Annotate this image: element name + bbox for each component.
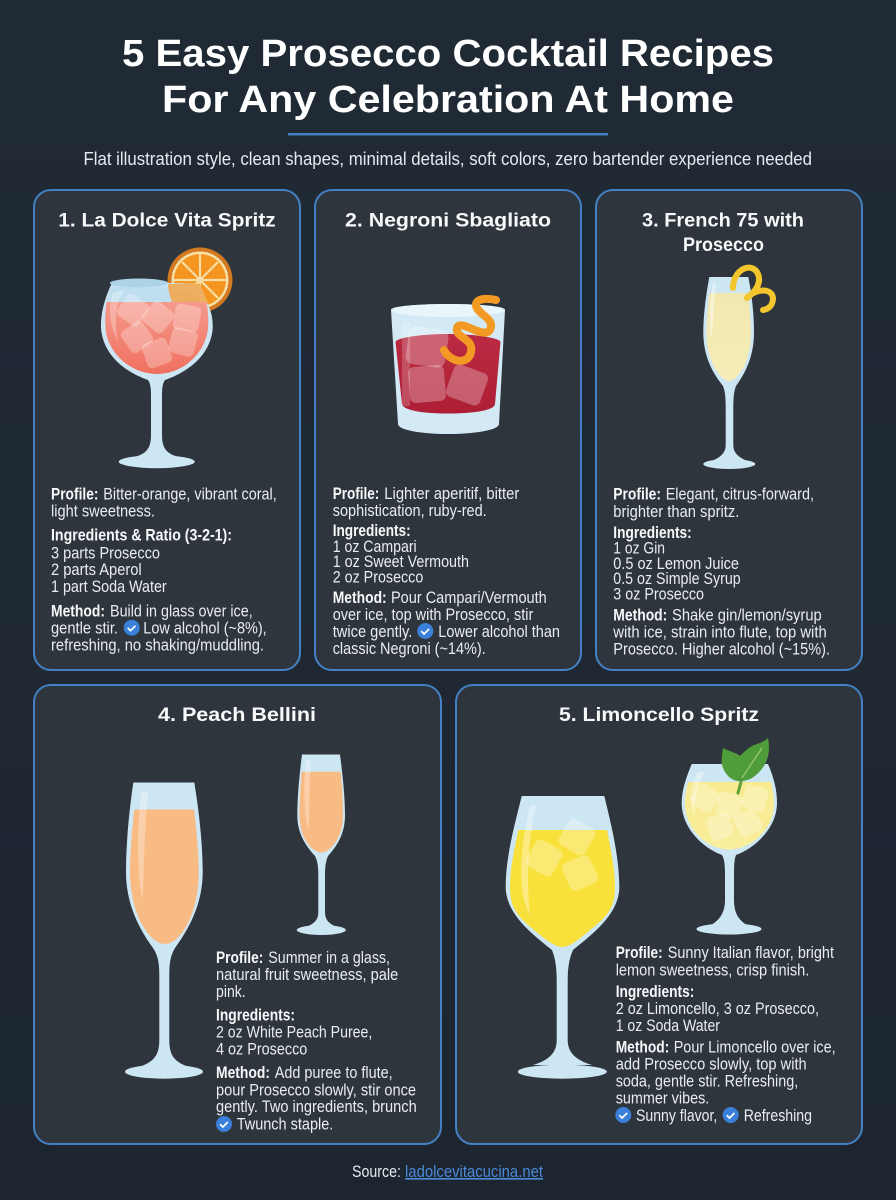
text: recipe 4: natural fruit sweetness, pale	[216, 966, 398, 984]
text: recipe 3: 1 oz Gin	[613, 540, 665, 558]
source footer: ladolcevitacucina.net	[405, 1163, 543, 1181]
text: recipe 3: Prosecco. Higher alcohol (~15%).	[613, 640, 830, 658]
text: recipe 4: Summer in a glass,	[268, 949, 390, 967]
text: recipe 1: gentle stir.	[51, 620, 118, 638]
text: recipe 3: with ice, strain into flute, top with	[612, 624, 827, 642]
text: recipe 2: 1 oz Campari	[333, 538, 417, 556]
text: recipe 1: 1 part Soda Water	[51, 578, 167, 596]
text: recipe 4: pink.	[216, 983, 246, 1001]
heading: Prosecco	[683, 234, 764, 256]
text: recipe 5: 2 oz Limoncello, 3 oz Prosecco,	[616, 1000, 819, 1018]
text: recipe 3	[612, 486, 830, 658]
text: recipe 4: 4 oz Prosecco	[216, 1040, 307, 1058]
icon: check badge	[417, 623, 433, 639]
heading: 5. Limoncello Spritz	[559, 704, 759, 726]
text: recipe 1: Method:	[51, 602, 105, 620]
text: recipe 4: Profile:	[216, 949, 263, 967]
icon: champagne flute with lemon twist	[703, 268, 773, 469]
text: recipe 2: Lighter aperitif, bitter	[384, 485, 520, 503]
text: recipe 4: pour Prosecco slowly, stir once	[216, 1082, 416, 1100]
text: recipe 2: 2 oz Prosecco	[333, 568, 423, 586]
text: recipe 5: Method:	[616, 1038, 669, 1056]
text: recipe 5: summer vibes.	[616, 1090, 709, 1108]
text: recipe 1: Build in glass over ice,	[110, 602, 253, 620]
text: recipe 2: Method:	[333, 589, 387, 607]
text: recipe 1: light sweetness.	[51, 502, 155, 520]
text: recipe 2: 1 oz Sweet Vermouth	[333, 553, 469, 571]
text: recipe 2: over ice, top with Prosecco, stir	[333, 606, 534, 624]
icon: small wine glass with mint	[682, 738, 777, 934]
text: recipe 5: Profile:	[616, 944, 663, 962]
text: recipe 1	[51, 486, 277, 654]
icon: small bellini flute	[297, 754, 346, 935]
title	[122, 33, 774, 121]
text: recipe 4: Add puree to flute,	[275, 1064, 393, 1082]
text: recipe 3: brighter than spritz.	[613, 503, 739, 521]
icon: spritz glass with orange slice	[101, 248, 232, 468]
icon: large wine glass	[506, 796, 619, 1079]
text: recipe 3: Method:	[613, 606, 667, 624]
icon: check badge	[124, 620, 140, 636]
icon: large bellini flute	[125, 782, 203, 1079]
panel: Negroni Sbagliato	[315, 190, 581, 670]
heading: 2. Negroni Sbagliato	[345, 209, 551, 231]
source footer	[352, 1163, 543, 1181]
text: recipe 3: 0.5 oz Simple Syrup	[613, 570, 741, 588]
panel: French 75 with Prosecco	[596, 190, 862, 670]
text: recipe 2: twice gently.	[333, 623, 412, 641]
title: For Any Celebration At Home	[162, 79, 734, 121]
text: recipe 2: classic Negroni (~14%).	[333, 640, 486, 658]
icon: check badge	[615, 1107, 631, 1123]
text: recipe 1: refreshing, no shaking/muddling.	[51, 636, 264, 654]
text: recipe 2: Profile:	[333, 485, 379, 503]
text: recipe 2: Lower alcohol than	[438, 623, 560, 641]
icon: check badge	[216, 1116, 232, 1132]
icon: check badge	[723, 1107, 739, 1123]
text: recipe 3: Shake gin/lemon/syrup	[672, 606, 822, 624]
text: recipe 5: Sunny Italian flavor, bright	[668, 944, 834, 962]
heading: 4. Peach Bellini	[158, 704, 316, 726]
text: recipe 2: Ingredients:	[333, 522, 411, 540]
text: recipe 3: Profile:	[613, 486, 661, 504]
text: recipe 3: 3 oz Prosecco	[613, 586, 704, 604]
text: recipe 4	[216, 949, 417, 1134]
source footer: Source:	[352, 1163, 401, 1181]
text: recipe 1: 2 parts Aperol	[51, 561, 142, 579]
text: recipe 5: Pour Limoncello over ice,	[674, 1038, 836, 1056]
text: recipe 5: Sunny flavor,	[636, 1107, 717, 1125]
text: recipe 5: lemon sweetness, crisp finish.	[616, 962, 809, 980]
text: recipe 3: 0.5 oz Lemon Juice	[613, 555, 739, 573]
text: recipe 1: Ingredients & Ratio (3-2-1):	[51, 526, 232, 544]
text: recipe 5: soda, gentle stir. Refreshing,	[616, 1072, 798, 1090]
text: recipe 1: Profile:	[51, 486, 98, 504]
panel: Peach Bellini	[34, 685, 441, 1144]
text: recipe 4: Twunch staple.	[237, 1116, 333, 1134]
panel: La Dolce Vita Spritz	[34, 190, 300, 670]
panel: Limoncello Spritz	[456, 685, 862, 1144]
text: recipe 2: sophistication, ruby-red.	[333, 502, 487, 520]
text: recipe 1: 3 parts Prosecco	[51, 544, 160, 562]
text: recipe 5: Ingredients:	[616, 983, 694, 1001]
text: recipe 5: 1 oz Soda Water	[616, 1017, 720, 1035]
text: recipe 1: Bitter-orange, vibrant coral,	[103, 486, 277, 504]
text: recipe 2	[333, 485, 560, 658]
heading: 1. La Dolce Vita Spritz	[58, 209, 276, 231]
text: recipe 4: Ingredients:	[216, 1006, 295, 1024]
title: 5 Easy Prosecco Cocktail Recipes	[122, 33, 774, 75]
text: recipe 2: Pour Campari/Vermouth	[391, 589, 547, 607]
heading: 3. French 75 with	[642, 209, 804, 231]
heading	[642, 209, 804, 256]
text: recipe 4: 2 oz White Peach Puree,	[216, 1024, 372, 1042]
text: recipe 3: Elegant, citrus-forward,	[666, 486, 814, 504]
text: recipe 5	[615, 944, 836, 1125]
text: recipe 5: add Prosecco slowly, top with	[616, 1056, 807, 1074]
subtitle: Flat illustration style, clean shapes, minimal details, soft colors, zero bartender experience needed	[84, 148, 812, 169]
text: recipe 5: Refreshing	[744, 1107, 812, 1125]
icon: rocks glass with orange peel	[391, 299, 505, 434]
text: recipe 4: Method:	[216, 1064, 270, 1082]
text: recipe 3: Ingredients:	[613, 524, 692, 542]
text: recipe 1: Low alcohol (~8%),	[143, 620, 267, 638]
text: recipe 4: gently. Two ingredients, brunch	[216, 1098, 417, 1116]
